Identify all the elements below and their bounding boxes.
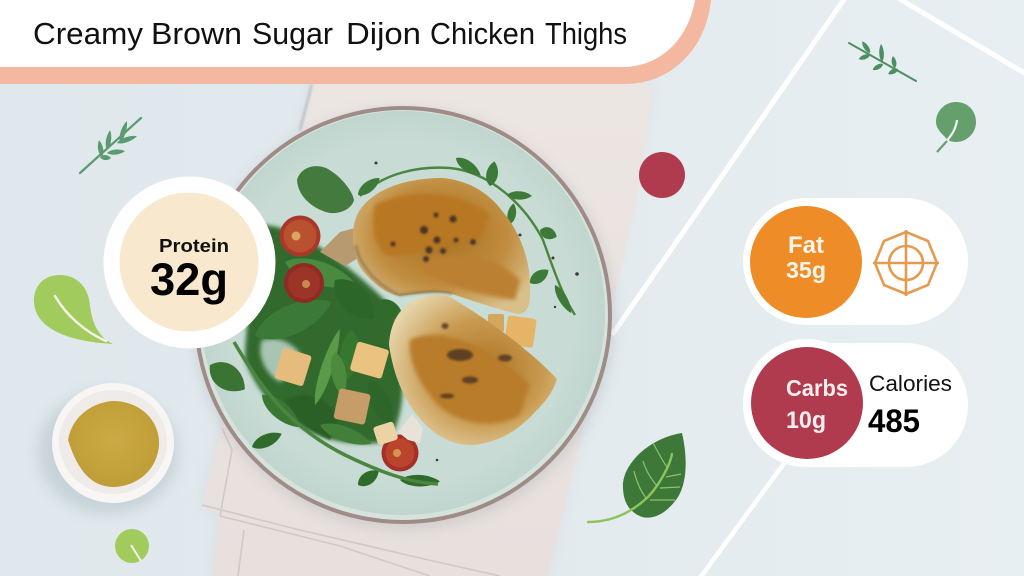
icon: small green leaf	[115, 529, 149, 563]
calories label: Calories	[869, 371, 952, 396]
plate specks	[374, 162, 579, 461]
big leaf	[249, 288, 338, 349]
long arugula stem	[234, 342, 438, 484]
chicken thigh, bottom	[389, 295, 557, 445]
title: Creamy	[33, 16, 144, 51]
chicken thigh, top	[353, 178, 530, 314]
icon: dark green leaf	[588, 433, 686, 522]
top arugula sprig	[355, 154, 575, 315]
icon: rosemary sprig, left	[80, 118, 141, 173]
title: Dijon	[346, 16, 421, 51]
carbs and calories pill	[743, 339, 968, 467]
title: Brown	[151, 16, 242, 51]
fat label: 35g	[786, 257, 826, 283]
calories value: 485	[868, 403, 920, 439]
title: Chicken	[430, 16, 535, 51]
icon: light green leaf	[34, 275, 113, 344]
protein label: Protein	[159, 235, 229, 256]
napkin	[202, 84, 652, 576]
title: Sugar	[252, 16, 333, 51]
fat label	[786, 232, 826, 283]
mustard bowl	[38, 383, 178, 514]
title	[33, 16, 627, 51]
protein badge	[104, 176, 276, 348]
decorative white lines	[612, 0, 1024, 576]
title banner	[0, 0, 711, 84]
spinach leaf	[297, 166, 354, 213]
carbs label: 10g	[786, 407, 826, 434]
icon: rosemary sprig, right	[849, 40, 916, 81]
plate	[194, 106, 614, 529]
fat pill	[743, 198, 968, 325]
arugula and mixed leaves	[281, 251, 360, 296]
tomatoes	[280, 216, 418, 472]
icon: target octagon	[873, 230, 939, 296]
icon: green leaf, right	[936, 102, 976, 152]
salad greens	[203, 154, 575, 490]
fat label: Fat	[788, 232, 824, 259]
title: Thighs	[545, 16, 627, 51]
protein value: 32g	[150, 254, 228, 305]
croutons	[274, 228, 537, 446]
carbs label: Carbs	[786, 375, 848, 401]
red dot	[639, 152, 685, 198]
carbs label	[786, 375, 848, 434]
